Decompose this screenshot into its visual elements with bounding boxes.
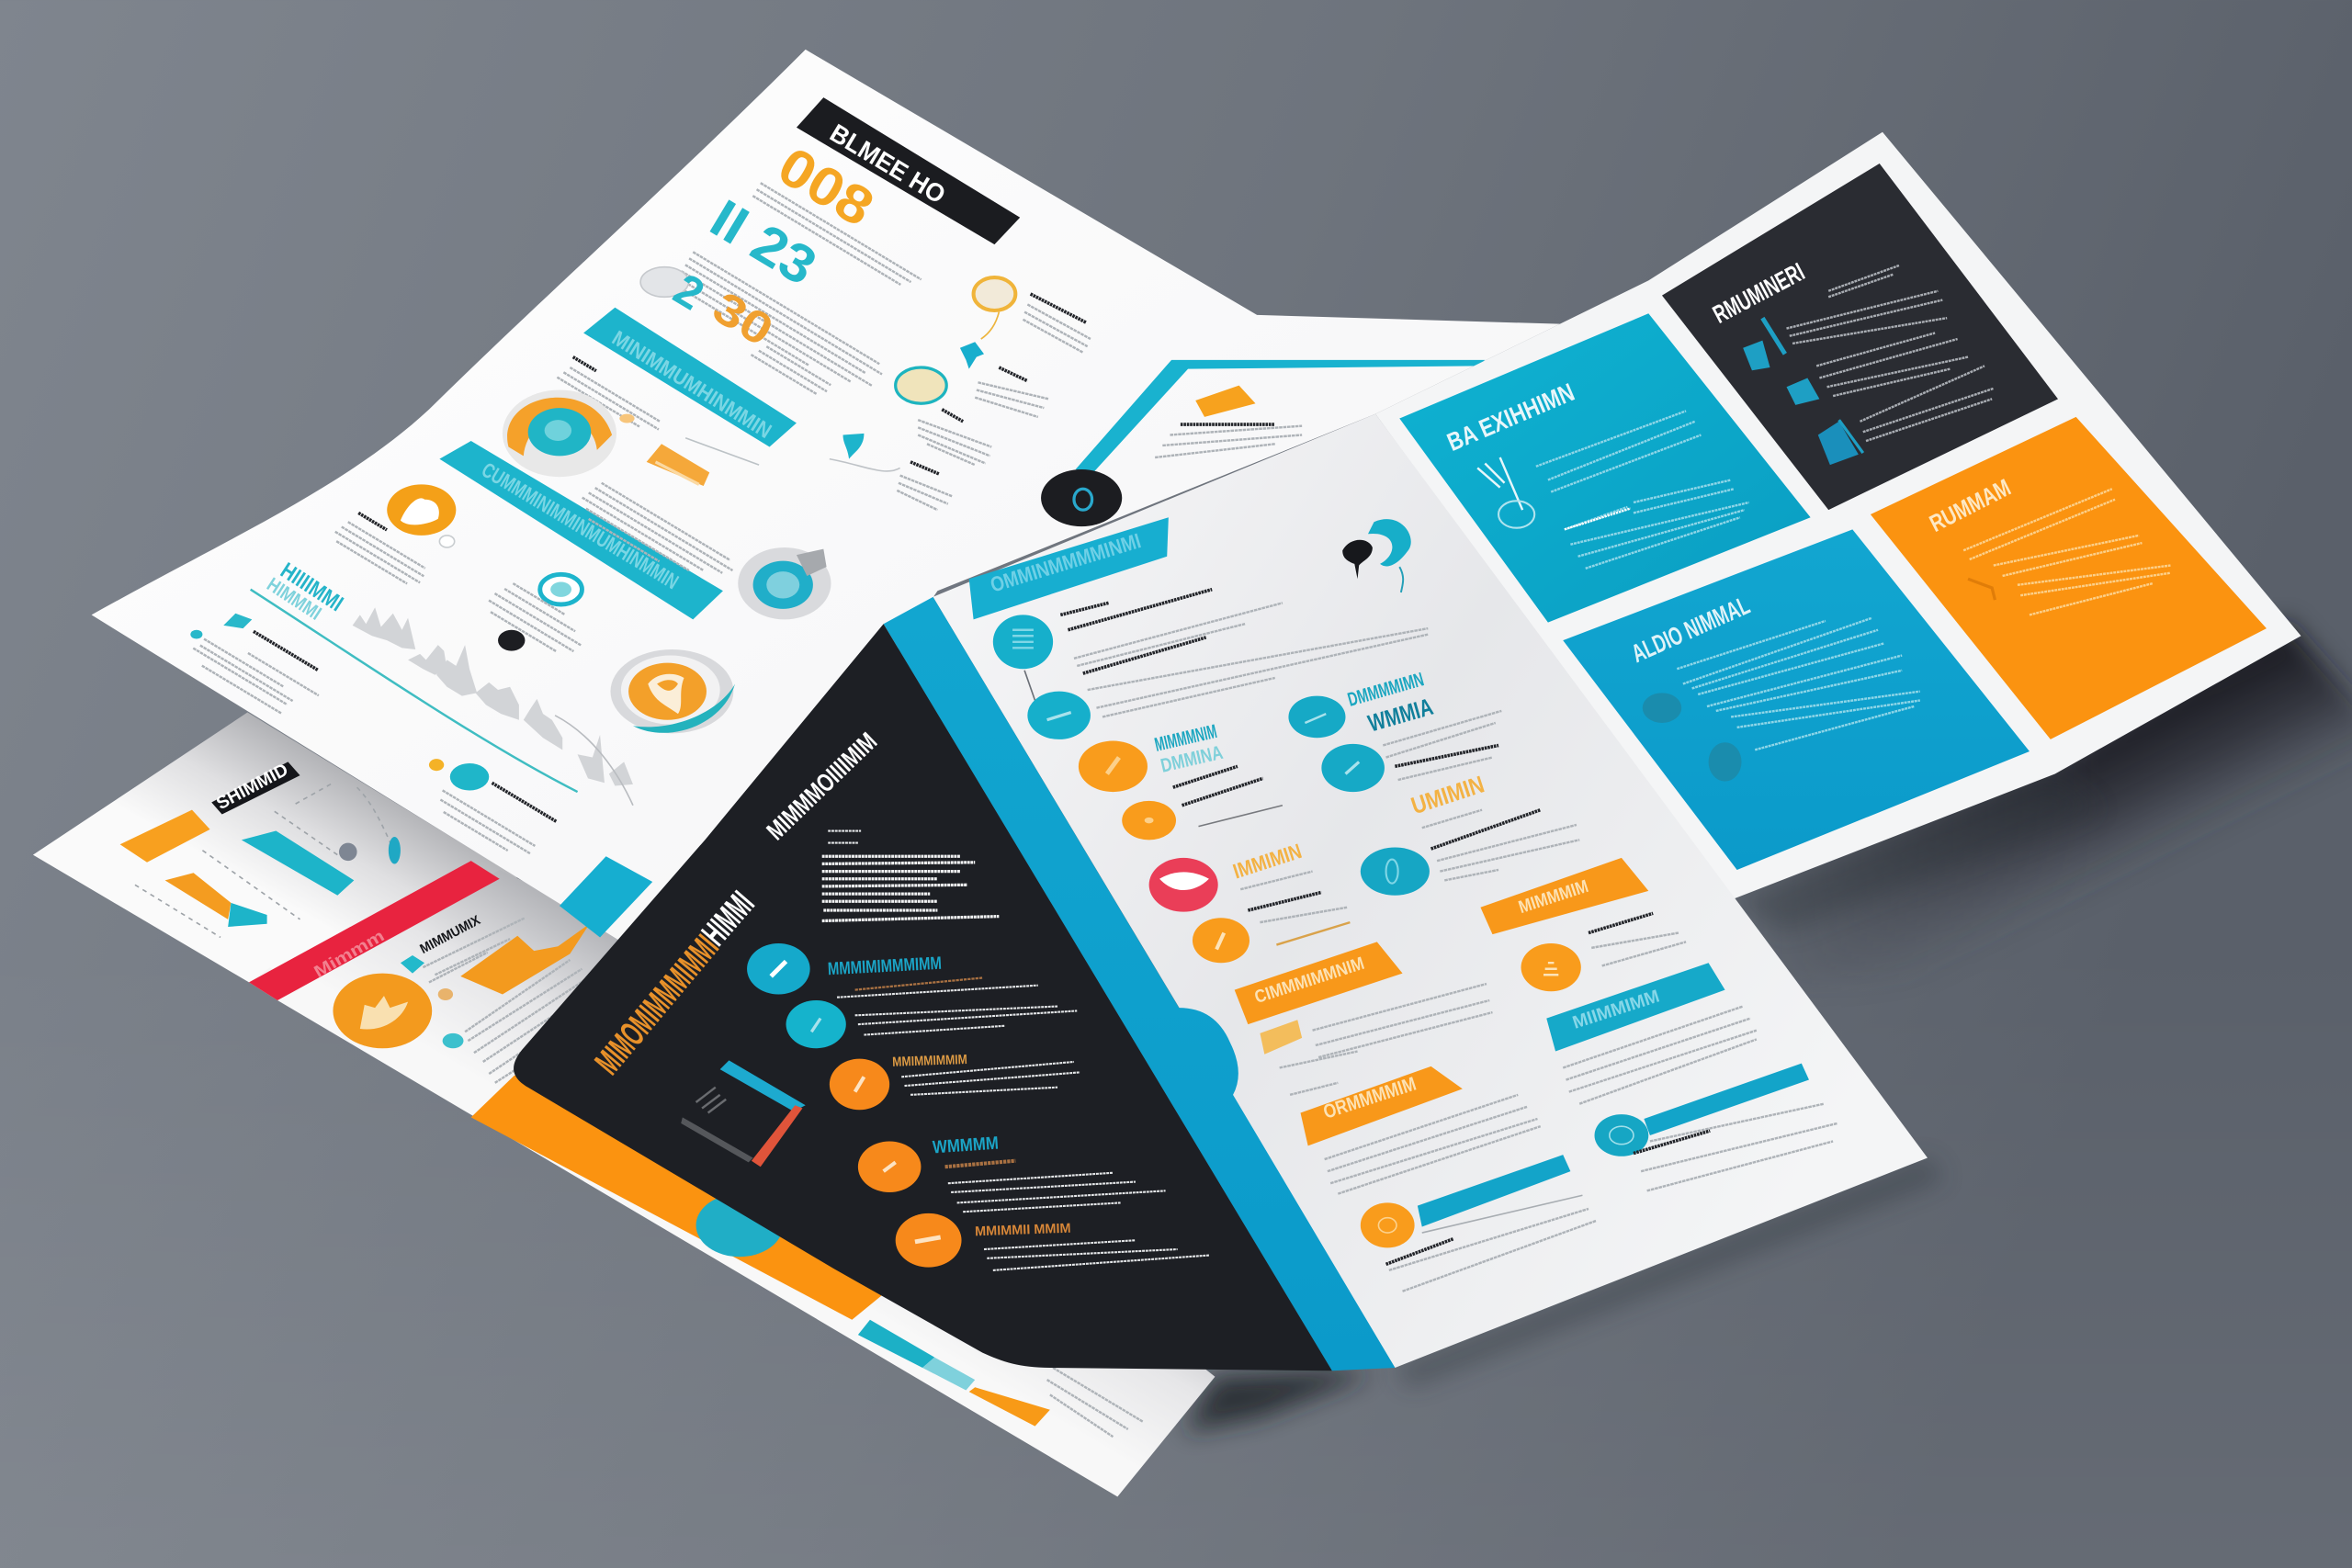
heading: ALDIO NIMMAL	[1627, 591, 1754, 668]
pale teal strip	[922, 1358, 975, 1391]
orange circle	[1079, 741, 1148, 792]
panel: front page	[884, 414, 1928, 1371]
footer text	[1047, 1368, 1143, 1437]
top ribbon: OMMINMMMMINMI	[988, 528, 1144, 597]
gold label	[1260, 1020, 1302, 1055]
text block	[1563, 1007, 1757, 1104]
orange bottom strip	[471, 1076, 885, 1320]
teal heading: MMMIMIMMMIMM	[827, 953, 942, 979]
heading: RUMMAM	[1925, 473, 2015, 537]
text lines	[1677, 618, 1920, 750]
small tan dot	[438, 988, 453, 1000]
black line	[1589, 913, 1653, 933]
text block	[752, 183, 922, 292]
text block	[187, 627, 319, 725]
text block	[1591, 933, 1686, 965]
small heading	[828, 831, 861, 843]
dark panel	[1662, 164, 2058, 510]
text block	[837, 986, 1077, 1035]
chart lines	[135, 783, 393, 937]
orange circle small	[1122, 801, 1176, 840]
orange circle icon	[387, 484, 456, 536]
text block	[332, 519, 428, 589]
pale heading: DMMINA	[1159, 742, 1225, 777]
text block	[751, 342, 831, 398]
big number 11 23: II 23	[700, 188, 826, 297]
text block	[1325, 1095, 1541, 1194]
black heading	[999, 367, 1027, 381]
teal bar two	[1644, 1064, 1809, 1135]
text block	[975, 382, 1048, 417]
black heading	[942, 410, 963, 422]
white heading two: HIMMI	[695, 885, 763, 953]
curve line	[251, 590, 578, 792]
teal drop	[843, 434, 864, 459]
black small dot	[498, 630, 525, 651]
text block	[948, 1173, 1166, 1212]
title bar	[797, 97, 1020, 244]
text block	[897, 476, 953, 510]
brochure shadow	[1185, 621, 2352, 1432]
teal icon three	[1818, 420, 1863, 465]
chart dot	[339, 843, 357, 861]
text block	[1240, 872, 1313, 889]
teal icon two	[1786, 378, 1819, 405]
orange block	[120, 810, 210, 863]
dark line	[1395, 745, 1498, 766]
black circle	[1041, 469, 1122, 526]
big number 2 30: 30	[705, 283, 781, 356]
teal circle	[747, 943, 810, 994]
orange ribbon three: ORMMMMIM	[1321, 1074, 1419, 1123]
panel: dark flap	[514, 624, 1332, 1371]
small block	[573, 357, 596, 371]
orange ribbon two	[1235, 942, 1403, 1024]
teal bar one	[1418, 1155, 1570, 1227]
thin line	[685, 438, 759, 465]
white paragraph	[822, 856, 999, 920]
top ribbon	[969, 517, 1169, 619]
teal circle	[450, 763, 489, 790]
teal heading: MIMMMNIM	[1153, 721, 1219, 756]
big number 2 30	[665, 265, 781, 356]
text block	[1389, 1209, 1596, 1292]
teal circle two	[1027, 692, 1091, 739]
orange panel	[1871, 417, 2267, 739]
teal half circle	[696, 1194, 783, 1257]
text block	[1422, 810, 1482, 828]
orange envelope	[460, 924, 590, 994]
black heading	[1181, 423, 1275, 425]
orange strip	[969, 1387, 1050, 1427]
red band label: Mimmm	[311, 926, 388, 981]
thin curve	[830, 459, 900, 471]
large orange plate icon	[610, 649, 735, 733]
black text	[492, 783, 556, 821]
text block	[1260, 908, 1347, 922]
orange heading: MIMOMIMMMIMMI	[588, 928, 727, 1082]
circle icon	[1498, 501, 1534, 528]
text block	[557, 365, 662, 436]
orange circle	[858, 1141, 921, 1192]
teal chevron	[1076, 360, 1485, 474]
text block	[1280, 984, 1492, 1095]
black text	[1060, 590, 1212, 673]
orange text	[945, 1161, 1015, 1167]
teal splash	[960, 342, 984, 369]
red band	[249, 861, 500, 1000]
teal ribbon	[1546, 963, 1725, 1052]
heading: RMUMINERI	[1708, 257, 1809, 329]
small outlined circle	[439, 536, 455, 547]
text block	[484, 577, 590, 660]
orange ribbon one: MIMMMIM	[1516, 876, 1591, 918]
teal ribbon: MIIMMIMM	[1570, 987, 1662, 1033]
orange heading: MMIMMII MMIM	[975, 1222, 1071, 1239]
teal square	[223, 614, 252, 628]
faint icon	[1968, 579, 1995, 600]
teal arrow head	[228, 903, 267, 927]
white heading one: MIMMMOIIIIMIM	[761, 727, 882, 845]
faint icon	[1709, 742, 1742, 782]
teal tip	[389, 837, 401, 863]
text block	[1437, 825, 1579, 880]
orange ribbon three	[1301, 1066, 1463, 1145]
orange bar	[647, 444, 709, 486]
orange circle	[1361, 1202, 1415, 1247]
text block	[1155, 426, 1302, 457]
text block	[434, 790, 535, 862]
orange line	[1276, 922, 1350, 945]
teal heading: HIIIIMMI	[276, 558, 347, 616]
gray text	[1074, 603, 1428, 716]
white bright line	[1565, 509, 1631, 529]
teal block	[242, 831, 354, 896]
teal circle	[1595, 1114, 1648, 1156]
black line	[1386, 1239, 1453, 1264]
orange ring	[503, 390, 616, 477]
text block	[1641, 1104, 1838, 1190]
gold heading: UMIMIN	[1408, 771, 1487, 819]
text block	[901, 1062, 1080, 1095]
bar frame icon	[681, 1060, 806, 1167]
orange circle	[1193, 918, 1250, 963]
red lips icon	[1149, 858, 1218, 912]
text block	[358, 513, 387, 530]
orange text	[855, 978, 982, 990]
teal band two	[439, 441, 723, 619]
text block	[984, 1240, 1209, 1270]
orange tag	[1195, 386, 1256, 417]
small lines	[423, 918, 525, 982]
teal icon one	[1743, 318, 1785, 370]
teal marker	[443, 1033, 463, 1048]
heading: BA EXIHHIMN	[1443, 378, 1578, 457]
orange tick	[619, 414, 635, 423]
black line	[1431, 810, 1541, 849]
teal panel one	[1399, 313, 1811, 623]
orange heading: MMIMMIMMIM	[892, 1053, 967, 1070]
circle glyph	[360, 996, 408, 1030]
gold teal ring	[896, 367, 946, 403]
panel: top-left sheet	[92, 50, 1560, 975]
teal circle	[786, 1000, 846, 1048]
teal heading: WMMMM	[932, 1134, 1000, 1158]
black line	[1248, 892, 1321, 910]
blue spine	[884, 597, 1395, 1371]
teal panel two	[1563, 529, 2030, 870]
teal heading: HIMMMI	[263, 574, 325, 625]
teal band one: MINIMMUMHINMMIN	[608, 325, 776, 443]
orange ribbon one	[1480, 858, 1648, 934]
black text	[1173, 766, 1263, 806]
skyline icons	[353, 607, 633, 786]
black line	[1634, 1131, 1710, 1154]
black heading	[1031, 294, 1086, 322]
icon: spade and arc	[1342, 519, 1411, 592]
teal dot	[190, 630, 202, 639]
text block	[254, 631, 318, 670]
text block	[574, 479, 737, 596]
teal circle one	[993, 615, 1053, 669]
gold ring	[974, 277, 1015, 339]
orange dot	[429, 759, 444, 771]
black label: SHIMMID	[213, 760, 291, 814]
text block	[465, 960, 588, 1083]
orange circle	[830, 1059, 889, 1110]
faint icon	[1643, 693, 1681, 723]
teal band two: CUMMMINIMMINMUMHINMMIN	[478, 457, 683, 593]
teal ring icon	[738, 547, 831, 619]
thin gray curve	[555, 716, 633, 806]
thin line	[1422, 1195, 1582, 1233]
connector	[1024, 671, 1035, 700]
orange circle	[333, 974, 432, 1048]
leaf icon	[1477, 457, 1522, 510]
black heading	[910, 462, 939, 474]
text block	[1023, 304, 1091, 353]
black text: MIMMUMIX	[418, 913, 483, 957]
text block	[1383, 711, 1501, 780]
gold heading: IMMIMIN	[1230, 839, 1305, 884]
teal tab	[560, 856, 652, 937]
orange ribbon two: CIMMMIMMNIM	[1252, 953, 1367, 1008]
dark teal heading: WMMIA	[1365, 693, 1436, 738]
text lines	[1786, 265, 1994, 441]
small teal ring	[540, 574, 582, 604]
teal circle	[1321, 744, 1385, 792]
text block	[918, 420, 991, 465]
teal strip	[858, 1320, 934, 1368]
teal circle	[1361, 847, 1430, 896]
big number 008: 008	[768, 136, 884, 238]
orange arrow	[165, 873, 231, 919]
orange circle	[1521, 943, 1581, 991]
panel: right tri-fold	[1375, 132, 2301, 900]
gray line	[1198, 806, 1283, 827]
panel: lower-left sheet	[33, 713, 1215, 1496]
teal square	[401, 955, 424, 974]
big number 2 30: 2	[665, 265, 712, 320]
gray ellipse icon	[640, 267, 688, 297]
text lines	[1963, 489, 2170, 615]
orange circle	[896, 1213, 962, 1268]
teal heading: DMMMMIMN	[1345, 669, 1426, 711]
text lines	[1536, 411, 1749, 569]
teal circle	[1288, 696, 1345, 738]
title bar: BLMEE HO	[825, 118, 950, 209]
text block	[673, 252, 886, 400]
